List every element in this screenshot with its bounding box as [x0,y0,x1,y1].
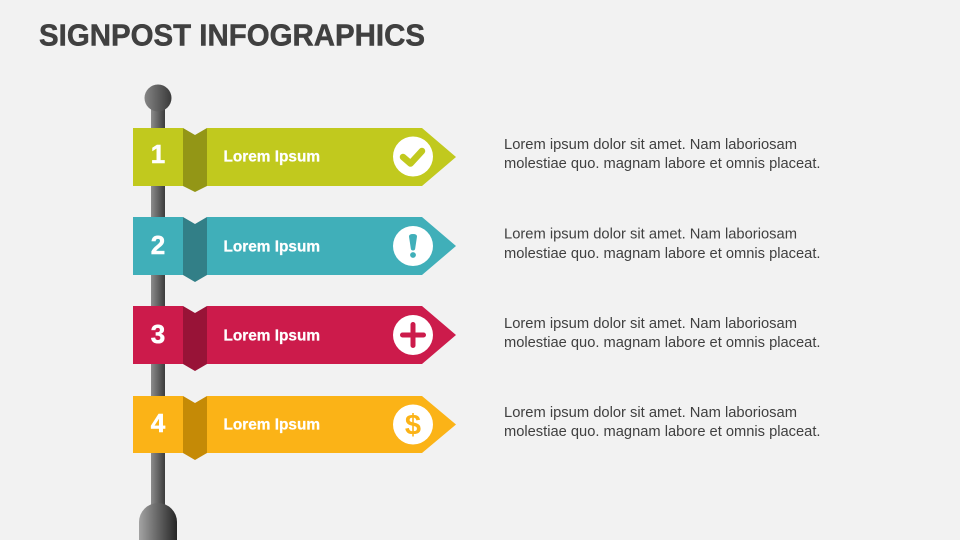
description 2 [504,226,820,262]
description 3: molestiae quo. magnam labore et omnis placeat. [504,335,820,351]
description 4: molestiae quo. magnam labore et omnis placeat. [504,424,820,440]
icon: dollar sign [393,404,433,444]
label 3: Lorem Ipsum [224,328,320,344]
description 3: Lorem ipsum dolor sit amet. Nam laboriosam [504,316,797,332]
number 3: 3 [151,319,165,349]
number 4: 4 [151,408,166,438]
icon: plus sign [393,315,433,355]
sign 2 [133,217,456,282]
icon: dollar sign: $ [405,410,421,442]
title: SIGNPOST INFOGRAPHICS [39,18,425,52]
description 4 [504,405,820,440]
sign 4 [133,396,456,460]
number 1: 1 [151,139,165,169]
sign 3 [133,306,456,371]
description 3 [504,316,820,351]
label 1: Lorem Ipsum [224,148,320,166]
description 1: molestiae quo. magnam labore et omnis placeat. [504,156,820,172]
sign 1 [133,128,456,192]
description 2: Lorem ipsum dolor sit amet. Nam laboriosam [504,226,797,242]
description 2: molestiae quo. magnam labore et omnis placeat. [504,246,820,262]
label 4: Lorem Ipsum [224,416,320,434]
number 2: 2 [151,230,165,260]
description 1 [504,137,820,172]
icon: exclamation mark [393,226,433,266]
description 1: Lorem ipsum dolor sit amet. Nam laboriosam [504,137,797,153]
label 2: Lorem Ipsum [224,238,320,256]
signpost pole [139,84,177,540]
icon: check mark [393,136,433,176]
description 4: Lorem ipsum dolor sit amet. Nam laboriosam [504,405,797,421]
